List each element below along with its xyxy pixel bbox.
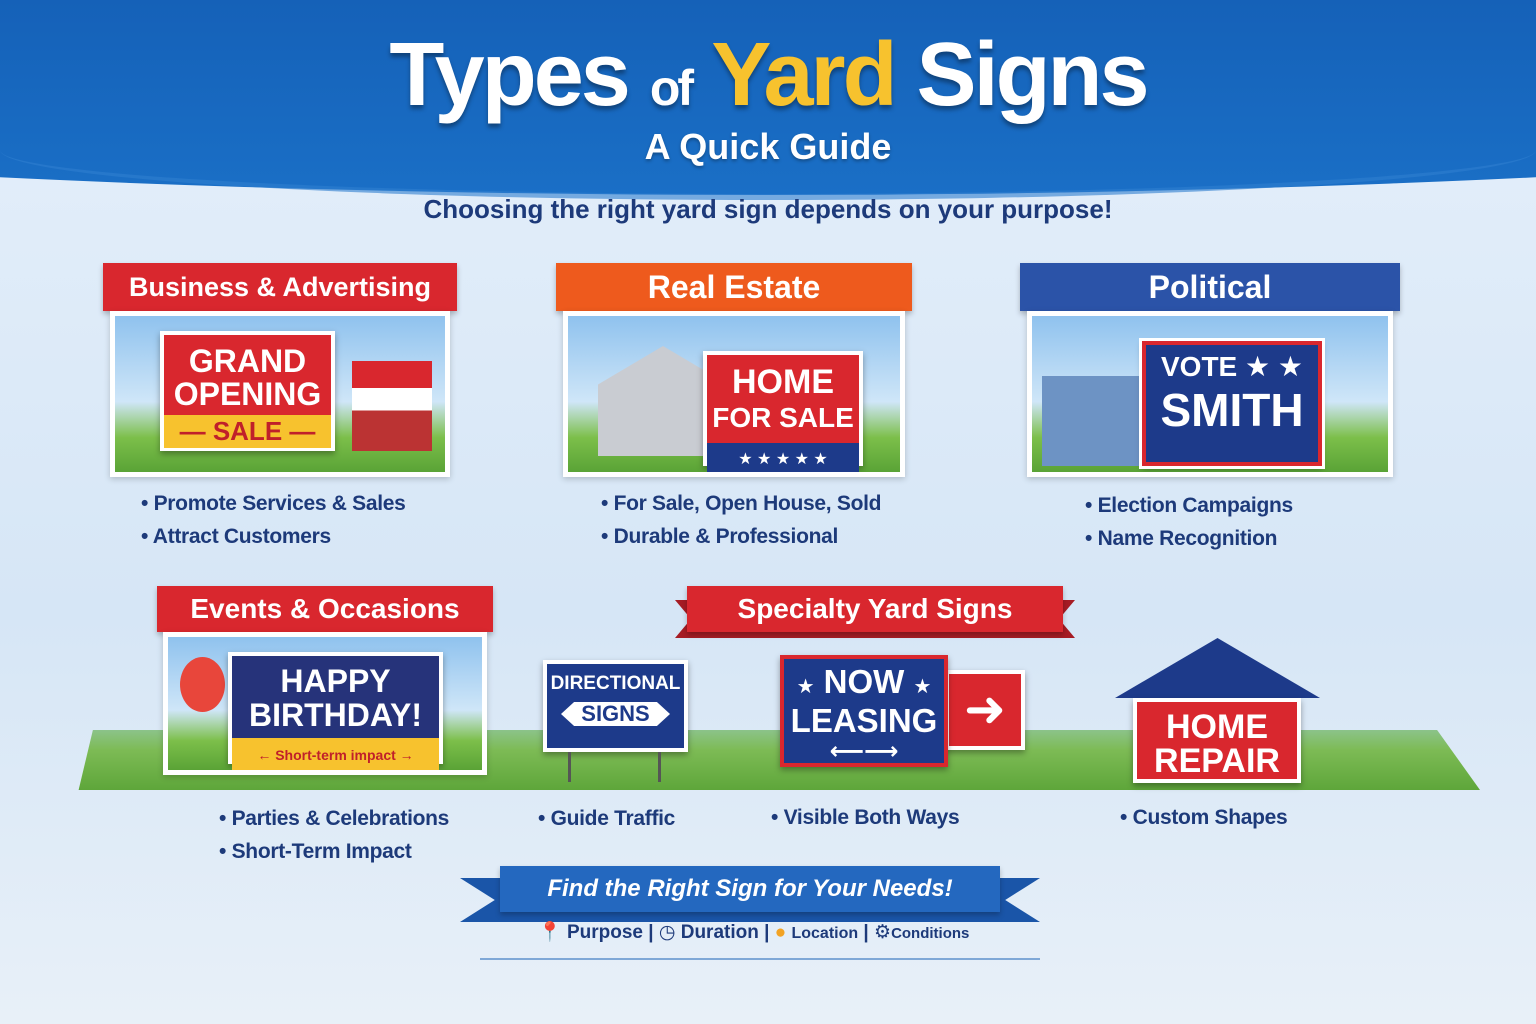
sign: now leasing: ➜ (964, 681, 1006, 737)
panel: political (1017, 263, 1403, 550)
header: real estate: Real Estate (648, 269, 820, 305)
bullets: business: • Attract Customers (141, 525, 331, 548)
scene: grand opening (110, 311, 450, 477)
bullets: political: • Name Recognition (1085, 527, 1277, 550)
tagline: Choosing the right yard sign depends on your purpose! (423, 194, 1113, 224)
sign: now leasing: LEASING (791, 702, 937, 739)
tent (352, 361, 432, 451)
scene: happy birthday (163, 632, 487, 775)
buildings (1042, 376, 1142, 466)
header: events: Events & Occasions (190, 593, 460, 624)
sign: grand opening: — SALE — (180, 416, 315, 446)
header: business: Business & Advertising (129, 272, 431, 302)
sign: happy birthday (228, 652, 443, 764)
ribbon: specialty (675, 586, 1075, 638)
sign: happy birthday: BIRTHDAY! (249, 697, 422, 733)
panel: business (100, 263, 460, 548)
bullets: events: • Short-Term Impact (219, 840, 412, 863)
panel: real estate (553, 263, 915, 548)
sign: directional: SIGNS (581, 701, 650, 726)
ground strip row 2 (78, 730, 1480, 790)
bullet: now leasing: • Visible Both Ways (771, 806, 959, 829)
sign: home for sale: FOR SALE (712, 402, 854, 433)
sign: grand opening: GRAND (189, 343, 306, 379)
bullets: business (141, 492, 406, 548)
sign: home repair: REPAIR (1154, 742, 1280, 780)
scene: vote smith (1027, 311, 1393, 477)
subtitle: A Quick Guide: A Quick Guide (645, 126, 891, 167)
sign: vote smith (1142, 341, 1322, 466)
sign: directional (539, 659, 692, 782)
header: real estate (556, 263, 912, 311)
bullets: real estate (601, 492, 881, 548)
bullets: events: • Parties & Celebrations (219, 807, 449, 830)
sign: grand opening (160, 331, 335, 451)
header: events (157, 586, 493, 632)
sign: happy birthday: ← Short-term impact → (257, 747, 414, 763)
sign: home for sale: HOME (732, 363, 834, 401)
sign: now leasing: ⟵⟶ (830, 738, 898, 765)
bullets: events (219, 807, 449, 863)
sign: now leasing: ★ NOW ★ (797, 663, 931, 700)
bullets: real estate: • For Sale, Open House, Sold (601, 492, 881, 515)
header: political (1020, 263, 1400, 311)
panel: events (154, 586, 496, 863)
title: Types of Yard Signs (389, 25, 1147, 125)
bullet: home repair: • Custom Shapes (1120, 806, 1287, 829)
balloons (180, 657, 225, 712)
header: political: Political (1149, 269, 1271, 305)
sign: home repair (1115, 638, 1320, 790)
sign: home repair: HOME (1166, 708, 1268, 746)
icons row: purpose duration location conditions: 📍 Purpose | ◷ Duration | ● Location | ⚙Conditions (538, 922, 969, 943)
sign: now leasing (776, 654, 1029, 774)
bullets: political: • Election Campaigns (1085, 494, 1293, 517)
sign: home for sale (703, 351, 863, 466)
bullets: business: • Promote Services & Sales (141, 492, 406, 515)
header: business (103, 263, 457, 311)
header: specialty (687, 586, 1063, 632)
house (598, 346, 703, 456)
bullets: real estate: • Durable & Professional (601, 525, 838, 548)
sign: directional: DIRECTIONAL (551, 673, 680, 694)
bullets: political (1085, 494, 1293, 550)
bullet: directional: • Guide Traffic (538, 807, 675, 830)
header band (0, 0, 1536, 195)
sign: vote smith: SMITH (1160, 384, 1304, 436)
sign: happy birthday: HAPPY (280, 663, 391, 699)
sign: grand opening: OPENING (174, 376, 321, 412)
banner: find the right sign (460, 866, 1040, 922)
scene: home for sale (563, 311, 905, 477)
sign: home for sale: ★ ★ ★ ★ ★ (738, 451, 828, 468)
banner: find the right sign: Find the Right Sign for Your Needs! (547, 875, 953, 902)
header: specialty: Specialty Yard Signs (738, 593, 1012, 624)
sign: vote smith: VOTE ★ ★ (1161, 351, 1303, 382)
